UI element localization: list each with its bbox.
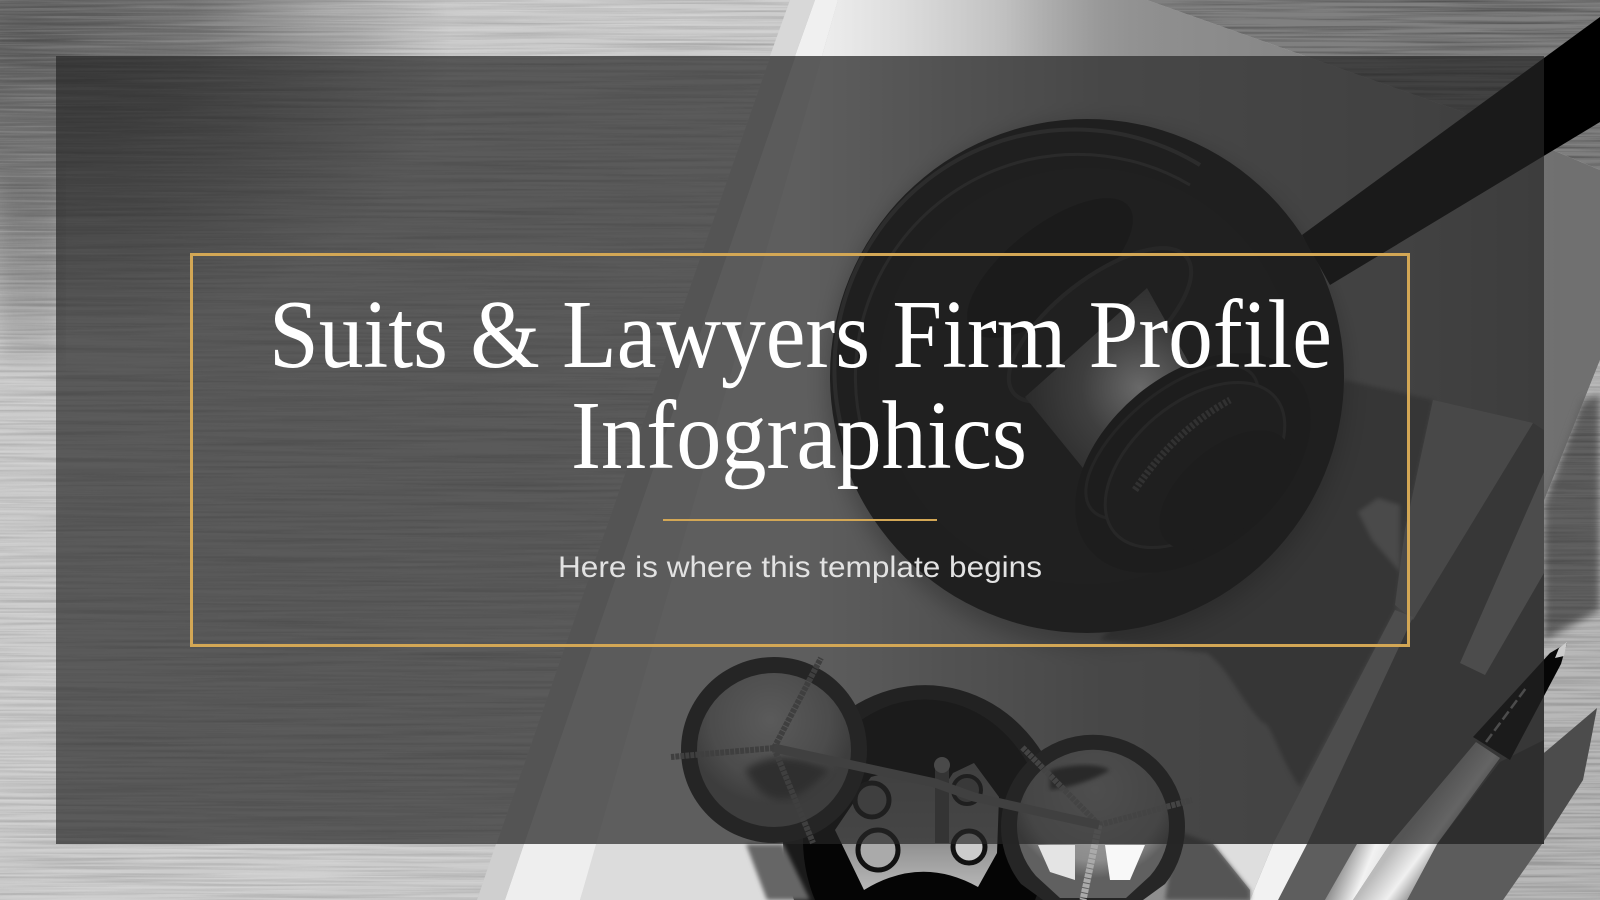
divider line [663, 519, 937, 521]
subtitle: Here is where this template begins [558, 551, 1042, 584]
gavel head [945, 173, 1353, 617]
wood bottom right [1409, 361, 1600, 900]
pen shadow [1407, 708, 1597, 900]
title [269, 281, 1332, 490]
wood top right [1147, 0, 1600, 170]
gavel handle [1302, 17, 1600, 285]
book page strip [1213, 610, 1413, 900]
scales beam [774, 748, 1099, 825]
paper page [580, 0, 1600, 900]
light page segment [1460, 472, 1544, 675]
book spine edge [477, 0, 838, 900]
scales centre plate [835, 757, 999, 890]
book dark cover band [1278, 423, 1544, 900]
title: Suits & Lawyers Firm Profile [269, 281, 1332, 389]
scales right pan [1001, 735, 1192, 900]
title: Infographics [571, 382, 1027, 490]
pan shadow on paper [1165, 830, 1250, 900]
scales left pan [671, 657, 867, 843]
paper sheet corner [1395, 400, 1533, 620]
gold frame [192, 254, 1408, 646]
scales base disc [746, 685, 1067, 900]
gavel sound block [827, 119, 1347, 646]
pen [1325, 642, 1567, 900]
light spot on paper [1358, 498, 1400, 572]
dark paper and gavel shadow [1100, 380, 1433, 787]
